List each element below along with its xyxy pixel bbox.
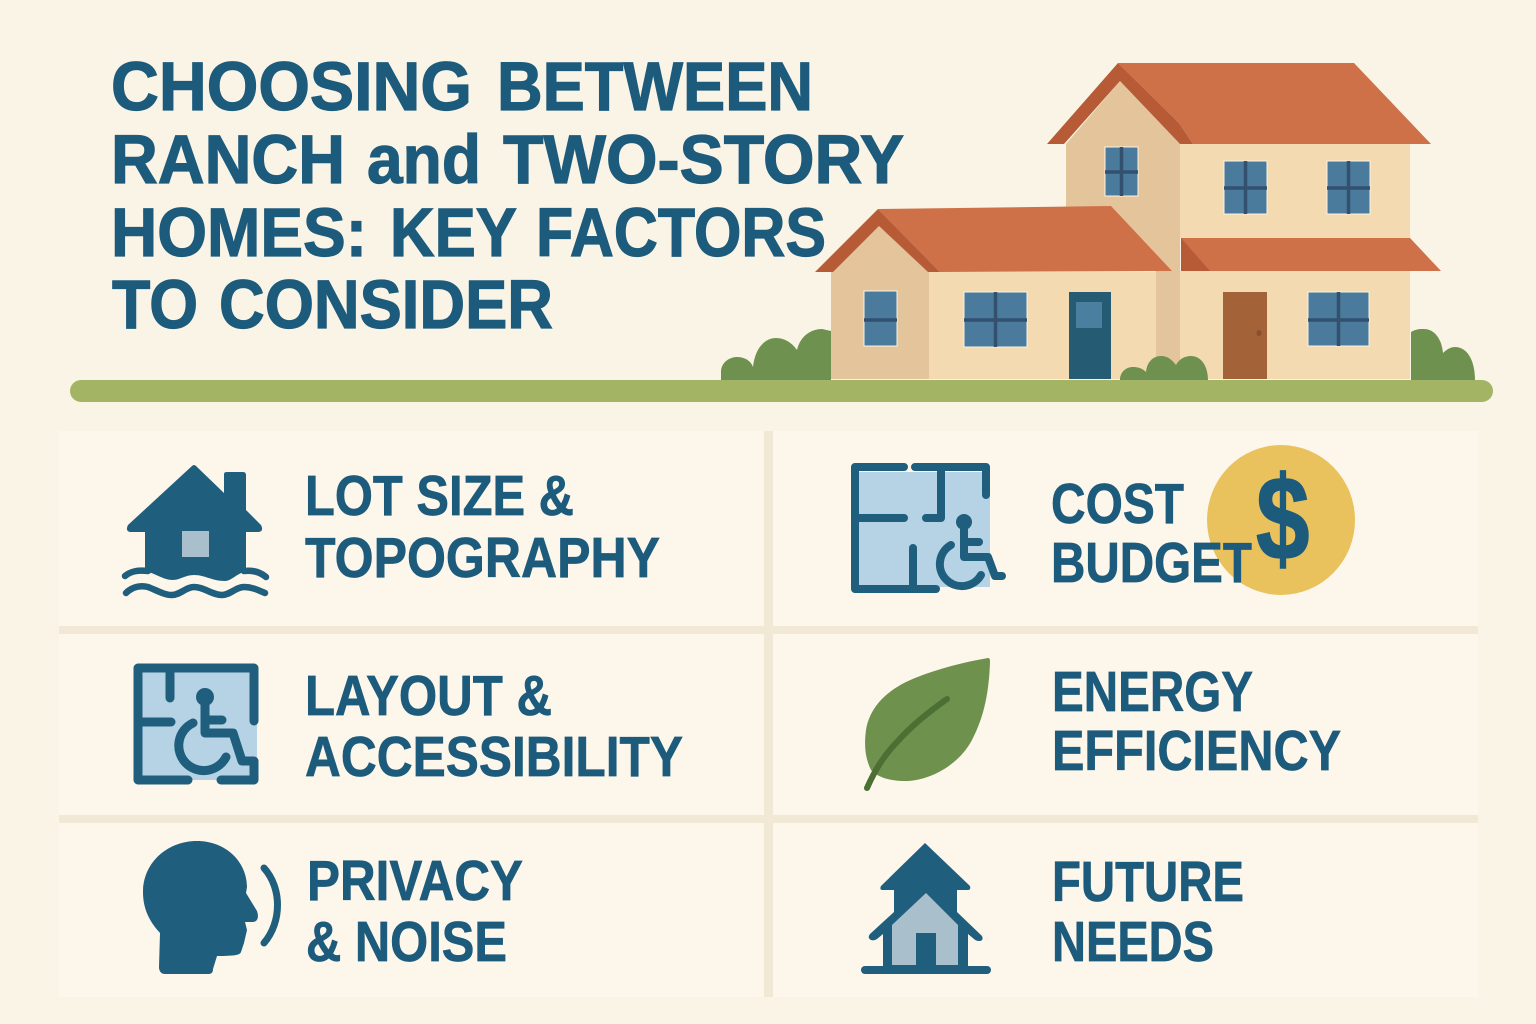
label — [305, 664, 683, 789]
title: FACTORS — [536, 194, 826, 271]
label: LAYOUT & — [305, 664, 552, 728]
label — [305, 464, 660, 590]
title: HOMES: — [111, 194, 367, 271]
icon: flooded house — [125, 465, 266, 595]
label: LOT SIZE & — [305, 464, 574, 528]
label: ACCESSIBILITY — [305, 725, 683, 789]
panel: energy efficiency — [865, 658, 1341, 788]
upper windows — [1105, 147, 1370, 214]
icon: floor plan with wheelchair — [138, 668, 257, 780]
label: COST — [1051, 472, 1184, 536]
title: TO — [112, 266, 198, 343]
title: and — [367, 121, 481, 198]
icon: expanding house — [865, 843, 987, 970]
label: FUTURE — [1052, 850, 1244, 914]
ranch section — [929, 272, 1156, 379]
illustration: house — [721, 63, 1475, 380]
panel: cost and budget — [855, 445, 1355, 595]
label: TOPOGRAPHY — [305, 526, 660, 590]
lower right section — [1180, 271, 1410, 379]
panel: layout and accessibility — [138, 664, 683, 789]
title: RANCH — [111, 121, 345, 198]
panel: grid background — [59, 431, 1478, 997]
label: ENERGY — [1052, 660, 1253, 724]
title: KEY — [390, 194, 517, 271]
label — [306, 849, 523, 974]
label — [1051, 472, 1252, 595]
icon: floor plan with wheelchair — [855, 467, 1002, 589]
icon: dollar coin — [1207, 445, 1355, 595]
centre bush — [1120, 356, 1208, 380]
title: CHOOSING — [111, 48, 472, 125]
icon: head with sound arc — [143, 841, 278, 974]
label — [1052, 850, 1244, 974]
icon: leaf — [865, 658, 990, 788]
title: TWO-STORY — [503, 121, 904, 198]
icon: dollar coin: $ — [1256, 452, 1310, 585]
label: PRIVACY — [307, 849, 523, 913]
ground strip — [70, 380, 1493, 402]
label: NEEDS — [1052, 910, 1214, 974]
label: BUDGET — [1051, 531, 1252, 595]
label — [1052, 660, 1341, 783]
title — [111, 48, 904, 343]
panel: future needs — [865, 843, 1244, 974]
title: CONSIDER — [219, 266, 553, 343]
label: EFFICIENCY — [1052, 719, 1341, 783]
panel: lot size and topography — [125, 464, 660, 595]
title: BETWEEN — [497, 48, 813, 125]
panel: privacy and noise — [143, 841, 523, 974]
upper storey wing — [1180, 144, 1410, 238]
label: & NOISE — [306, 910, 507, 974]
bushes behind house — [721, 329, 1475, 380]
